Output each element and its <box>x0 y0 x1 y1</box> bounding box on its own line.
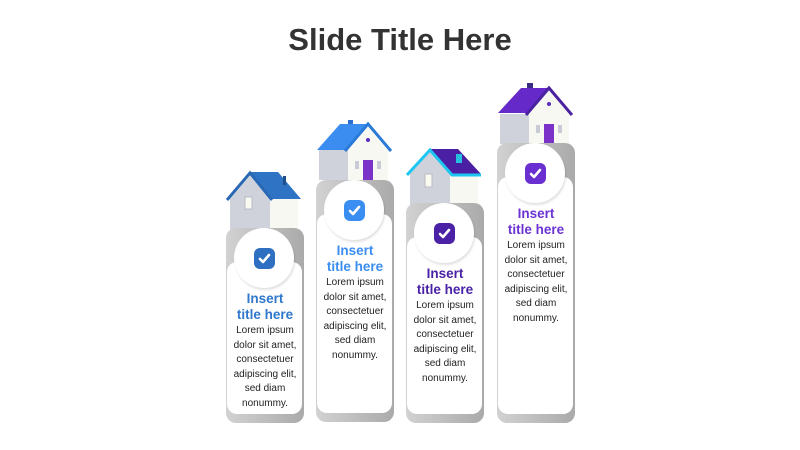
text 1: Insert <box>247 291 283 306</box>
title: Slide Title Here <box>288 22 512 57</box>
text 3: nonummy. <box>422 372 468 384</box>
column 4 <box>497 83 575 423</box>
text 1 <box>234 291 296 408</box>
house 4 <box>498 83 573 144</box>
text 2 <box>324 243 386 360</box>
text 3: title here <box>417 282 473 297</box>
text 2: nonummy. <box>332 350 378 360</box>
text 1: adipiscing elit, <box>234 368 296 380</box>
text 2: consectetuer <box>326 306 384 317</box>
text 4: adipiscing elit, <box>505 284 567 294</box>
column 3 <box>406 148 484 423</box>
text 1: sed diam <box>245 383 285 394</box>
text 4: dolor sit amet, <box>505 254 567 266</box>
text 1: nonummy. <box>242 398 288 408</box>
text 3: dolor sit amet, <box>414 314 476 326</box>
text 3: consectetuer <box>416 329 474 340</box>
text 4: consectetuer <box>507 269 565 280</box>
text 4 <box>505 206 567 324</box>
house 1 <box>226 170 301 230</box>
text 3 <box>414 266 476 384</box>
text 1: dolor sit amet, <box>234 340 296 350</box>
text 2: adipiscing elit, <box>324 320 386 332</box>
icon circle 2 <box>324 180 384 240</box>
house 2 <box>317 120 392 180</box>
text 2: dolor sit amet, <box>324 292 386 302</box>
icon circle 1 <box>234 228 294 288</box>
icon circle 4 <box>505 143 565 203</box>
text 2: Insert <box>337 243 373 258</box>
text 2: title here <box>327 259 383 274</box>
text 2: sed diam <box>335 335 375 346</box>
column 2 <box>316 120 394 422</box>
column 1 <box>226 170 304 423</box>
text 1: consectetuer <box>236 354 294 365</box>
house 3 <box>406 148 481 205</box>
text 4: Lorem ipsum <box>507 240 565 251</box>
text 3: adipiscing elit, <box>414 344 476 354</box>
text 4: title here <box>508 222 564 237</box>
icon circle 3 <box>414 203 474 263</box>
text 1: Lorem ipsum <box>236 325 294 336</box>
text 4: sed diam <box>516 298 556 309</box>
text 1: title here <box>237 307 293 322</box>
text 3: Insert <box>427 266 463 281</box>
text 2: Lorem ipsum <box>326 277 384 288</box>
text 4: nonummy. <box>513 312 559 324</box>
text 3: sed diam <box>425 358 465 369</box>
text 4: Insert <box>518 206 554 221</box>
text 3: Lorem ipsum <box>416 300 474 311</box>
